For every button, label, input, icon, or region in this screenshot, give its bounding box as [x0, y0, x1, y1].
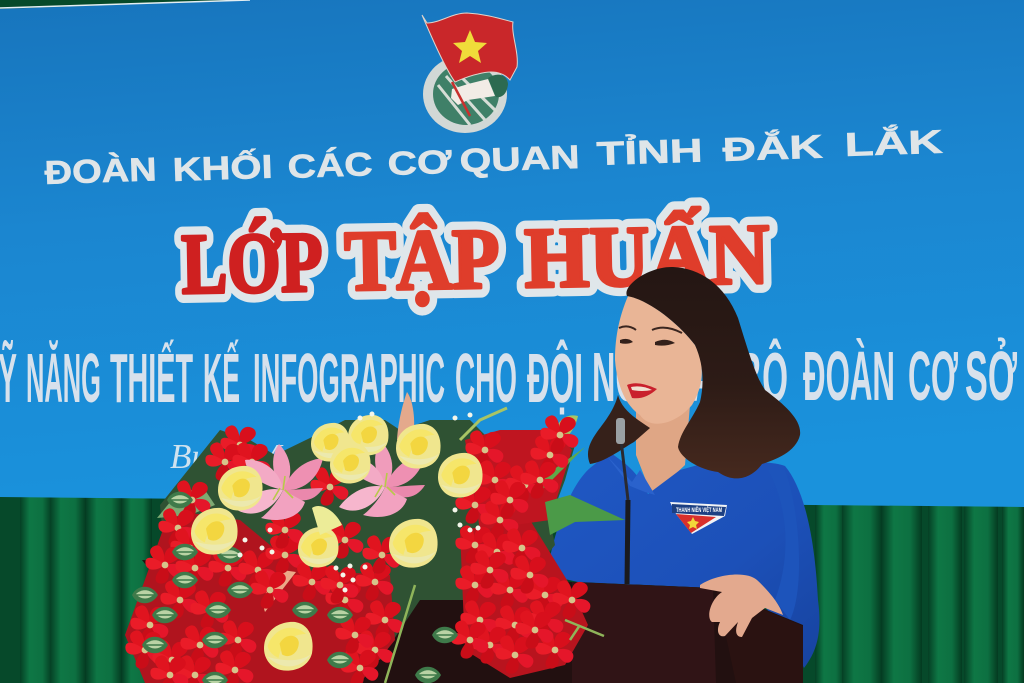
heading: organisation name: LẮK	[844, 123, 943, 163]
subtitle: course name: BỘ	[738, 337, 788, 416]
face	[615, 296, 702, 424]
subtitle: course name: THIẾT	[110, 339, 193, 417]
speaker	[547, 267, 819, 668]
subtitle: course name: ĐOÀN	[803, 337, 895, 415]
flower bud	[397, 392, 414, 440]
hair left curls	[588, 395, 650, 464]
heading: organisation name: QUAN	[459, 138, 580, 179]
heading: organisation name	[44, 123, 943, 191]
heading: organisation name: ĐẮK	[722, 128, 823, 168]
subtitle: course name: ĐỘI	[527, 338, 583, 417]
heading: training class title: LỚP	[181, 214, 323, 312]
speaker: THANH NIÊN VIỆT NAM	[676, 505, 722, 514]
stems	[385, 585, 604, 683]
sprig top	[460, 408, 507, 440]
variegated leaves	[152, 607, 178, 623]
red mass right	[460, 520, 588, 678]
foliage mass	[160, 420, 575, 660]
pink lilies	[237, 444, 323, 520]
heading: organisation name: CƠ	[387, 143, 453, 182]
subtitle: course name: NĂNG	[26, 339, 101, 417]
yellow roses	[191, 508, 238, 555]
eyebrows	[619, 326, 682, 333]
heading: training class title: TẬP	[344, 210, 500, 309]
blue banner	[0, 0, 1024, 507]
subtitle: course name: INFOGRAPHIC	[253, 339, 445, 417]
mouth	[627, 383, 657, 398]
heading: training class title: LỚP	[181, 214, 323, 312]
red mass upper right	[465, 430, 572, 530]
hair right mass	[626, 267, 800, 478]
subtitle: course name: NGŨ	[592, 338, 664, 416]
baby's breath dots	[240, 414, 478, 590]
heading: training class title	[181, 206, 770, 312]
place line: Buôn Ma Thuột	[170, 437, 391, 476]
subtitle: course name: CƠ	[908, 337, 958, 415]
heading: organisation name: TỈNH	[596, 132, 703, 172]
heading: organisation name: CÁC	[287, 145, 373, 185]
shirt	[547, 452, 819, 668]
subtitle: course name: KẾ	[203, 339, 240, 417]
red flowers	[220, 425, 258, 464]
red mass left	[125, 510, 395, 683]
subtitle: course name: CÁN	[672, 338, 732, 416]
heading: training class title: HUẤN	[524, 206, 770, 306]
fern right	[545, 495, 625, 535]
subtitle: course name	[0, 336, 1017, 417]
hand on podium	[700, 575, 783, 637]
heading: organisation name: KHỐI	[172, 147, 273, 188]
microphone	[616, 418, 628, 584]
eyes	[620, 339, 675, 346]
heading: organisation name: ĐOÀN	[44, 150, 157, 191]
heading: training class title: TẬP	[344, 210, 500, 309]
neck	[636, 405, 690, 496]
podium	[142, 560, 803, 683]
heading: training class title: HUẤN	[524, 206, 770, 306]
subtitle: course name: CHO	[455, 339, 517, 417]
icon: youth union logo	[422, 13, 517, 133]
fern left	[157, 490, 215, 518]
flower arrangement	[125, 392, 625, 683]
badge	[670, 502, 727, 534]
